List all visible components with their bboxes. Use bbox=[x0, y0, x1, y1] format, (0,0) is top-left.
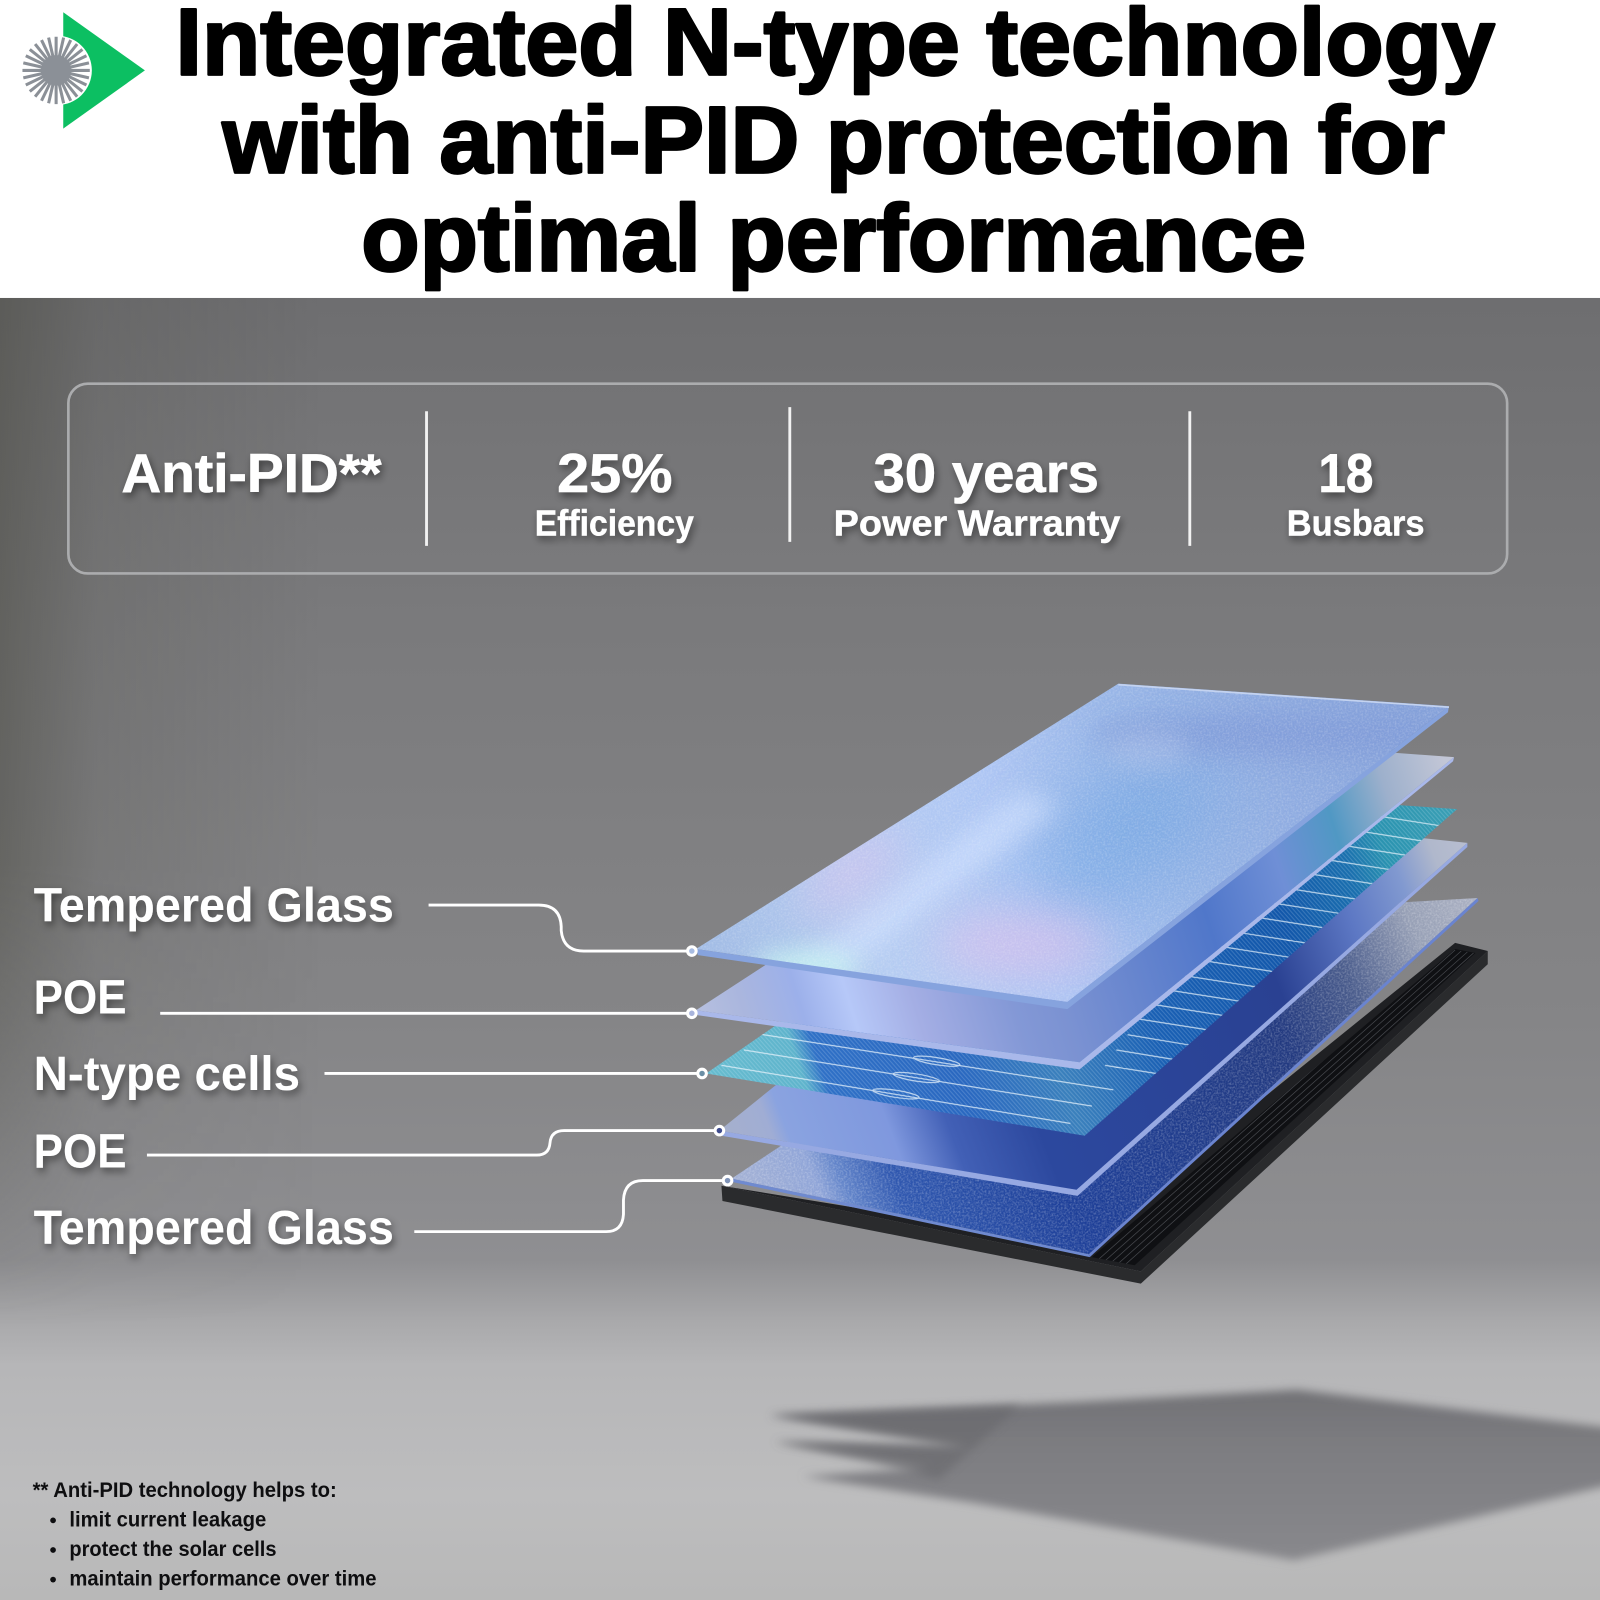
stat: Anti-PID: Anti-PID** bbox=[121, 442, 382, 504]
solar panel exploded layers bbox=[684, 673, 1500, 1284]
label: Tempered Glass lower: Tempered Glass bbox=[34, 1202, 394, 1255]
footnote: maintain performance over time bbox=[69, 1567, 377, 1591]
layer: lower tempered glass bbox=[732, 898, 1478, 1258]
title: with anti-PID protection for bbox=[221, 87, 1445, 193]
label: POE lower bbox=[34, 1125, 724, 1178]
layer: upper POE bbox=[696, 733, 1454, 1069]
stat: 18 busbars: 18 bbox=[1318, 442, 1373, 504]
stat: 30 years power warranty: Power Warranty bbox=[834, 504, 1121, 544]
layer: black frame bbox=[721, 943, 1488, 1284]
cast shadow bbox=[769, 1390, 1600, 1560]
title bbox=[176, 0, 1495, 291]
label: Tempered Glass lower bbox=[34, 1176, 732, 1255]
stats panel bbox=[68, 384, 1507, 573]
stat: 18 busbars: Busbars bbox=[1287, 504, 1424, 544]
label: N-type cells bbox=[34, 1048, 706, 1101]
footnote: protect the solar cells bbox=[69, 1537, 277, 1561]
title: optimal performance bbox=[361, 185, 1306, 291]
stat: 30 years power warranty bbox=[834, 442, 1121, 544]
label: Tempered Glass bbox=[34, 879, 696, 955]
layer: upper tempered glass bbox=[684, 673, 1459, 1010]
logo bbox=[22, 12, 145, 129]
label: Tempered Glass: Tempered Glass bbox=[34, 879, 394, 932]
stat: 18 busbars bbox=[1287, 442, 1424, 544]
stat: 25% efficiency bbox=[535, 442, 694, 544]
label: POE lower: POE bbox=[34, 1125, 127, 1178]
footnote: limit current leakage bbox=[69, 1508, 266, 1532]
label: N-type cells: N-type cells bbox=[34, 1048, 300, 1101]
stat: 30 years power warranty: 30 years bbox=[873, 442, 1099, 504]
footnote bbox=[33, 1478, 377, 1591]
layer: lower POE bbox=[719, 806, 1467, 1196]
white header background bbox=[0, 0, 1600, 299]
stat: 25% efficiency: 25% bbox=[557, 442, 672, 504]
layer: N-type cells bbox=[708, 805, 1457, 1136]
footnote: ** Anti-PID technology helps to: bbox=[33, 1478, 337, 1502]
label: POE bbox=[34, 971, 696, 1024]
label: POE: POE bbox=[34, 971, 127, 1024]
stat: 25% efficiency: Efficiency bbox=[535, 504, 694, 544]
